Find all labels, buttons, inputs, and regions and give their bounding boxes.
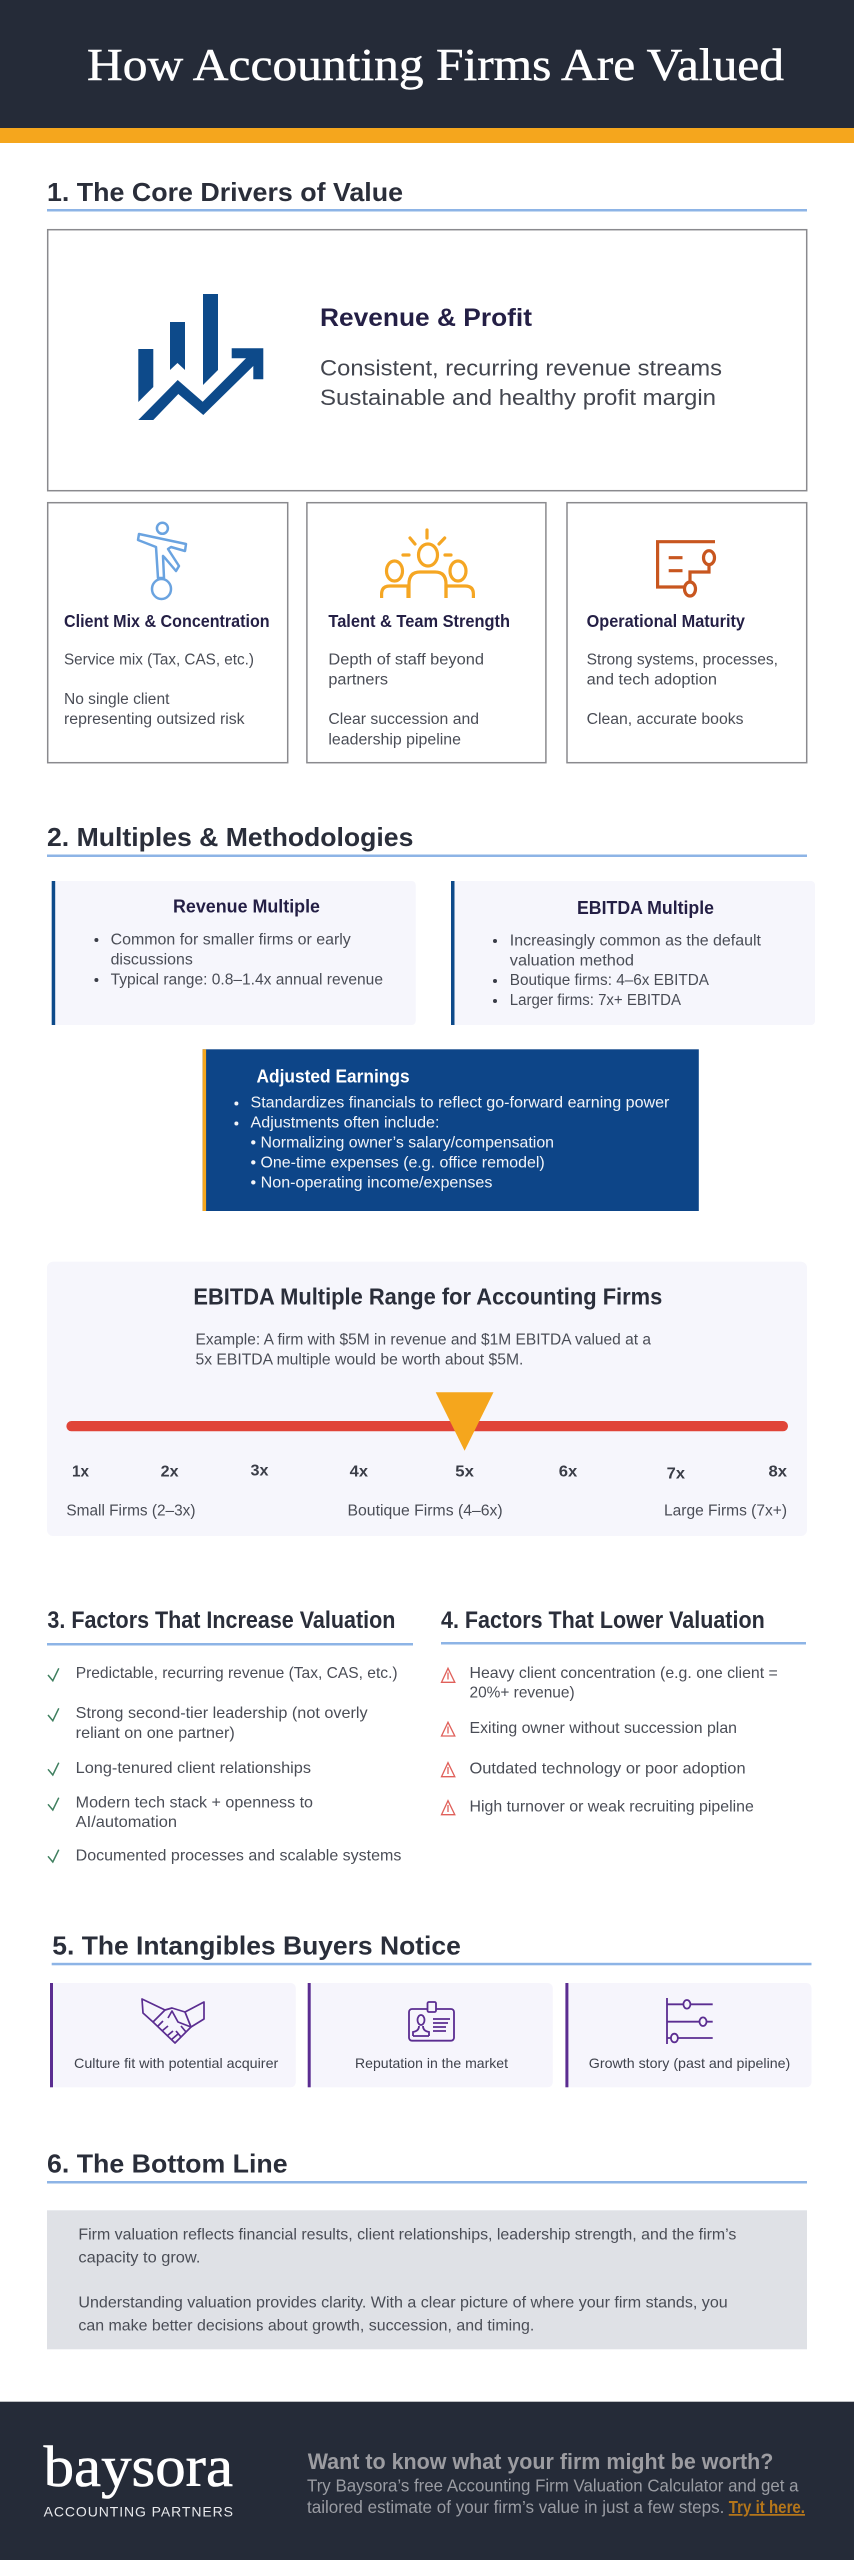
- list: adjusted earnings points: • Non-operating income/expenses: [250, 1175, 493, 1192]
- list: lower factors with warning icons: Exiting owner without succession plan: [470, 1720, 737, 1737]
- list: lower factors with warning icons: [442, 1665, 778, 1816]
- scale labels: 8x: [768, 1464, 787, 1481]
- panel: culture fit: [50, 1983, 296, 2087]
- section 2: multiples and methodologies: [47, 822, 815, 1536]
- list: revenue multiple points: discussions: [111, 951, 193, 968]
- list: lower factors with warning icons: Heavy client concentration (e.g. one client =: [470, 1665, 778, 1682]
- icon: team with light rays: [382, 530, 473, 598]
- marker at 5x: [436, 1392, 494, 1451]
- text: talent details: Depth of staff beyond: [328, 652, 484, 669]
- call to action: Try Baysora’s free Accounting Firm Valuation Calculator and get a: [307, 2476, 799, 2496]
- firm size labels: [66, 1503, 787, 1520]
- header banner: [0, 0, 854, 143]
- card heading: EBITDA multiple: EBITDA Multiple: [577, 898, 714, 918]
- text: worked example: Example: A firm with $5M in revenue and $1M EBITDA valued at a: [196, 1332, 651, 1349]
- text: revenue and profit description: Consistent, recurring revenue streams: [320, 356, 722, 381]
- panel: operational maturity: [567, 503, 807, 763]
- section 5: intangibles buyers notice: [50, 1931, 812, 2087]
- firm size labels: Boutique Firms (4–6x): [348, 1503, 503, 1520]
- text: operational details: and tech adoption: [587, 672, 717, 689]
- list: lower factors with warning icons: 20%+ revenue): [470, 1685, 575, 1702]
- card heading: talent: Talent & Team Strength: [328, 611, 510, 631]
- call to action: Try it here.: [729, 2497, 805, 2517]
- icon: balancing figure: [138, 523, 186, 599]
- footer: [0, 2402, 854, 2560]
- panel: adjusted earnings: [203, 1049, 699, 1211]
- section 4: factors that lower valuation: [441, 1607, 806, 1816]
- panel: growth story: [565, 1983, 812, 2087]
- panel: EBITDA multiple range chart: [47, 1262, 807, 1536]
- list: increase factors with check marks: Documented processes and scalable systems: [76, 1847, 401, 1864]
- call to action: Want to know what your firm might be worth?: [308, 2449, 773, 2474]
- scale labels: 5x: [455, 1464, 474, 1481]
- text: talent details: [328, 652, 484, 749]
- panel: revenue multiple: [52, 881, 416, 1025]
- card heading: operational maturity: Operational Maturity: [587, 611, 745, 631]
- section 6: the bottom line: [47, 2148, 807, 2349]
- list: EBITDA multiple points: valuation method: [510, 952, 634, 969]
- list: EBITDA multiple points: Increasingly common as the default: [510, 932, 762, 949]
- list: increase factors with check marks: reliant on one partner): [76, 1725, 235, 1742]
- list: adjusted earnings points: • One-time expenses (e.g. office remodel): [250, 1155, 545, 1172]
- text: client mix details: No single client: [64, 691, 170, 708]
- panel: summary text: capacity to grow.: [78, 2249, 200, 2266]
- section 3: factors that increase valuation: [47, 1607, 413, 1864]
- logo: baysora: ACCOUNTING PARTNERS: [44, 2503, 233, 2519]
- panel: client mix and concentration: [48, 503, 288, 763]
- list: increase factors with check marks: Long-tenured client relationships: [76, 1760, 311, 1777]
- panel: talent and team strength: [307, 503, 546, 763]
- logo: baysora: baysora: [44, 2434, 233, 2499]
- list: revenue multiple points: Common for smaller firms or early: [111, 931, 351, 948]
- scale labels: 1x: [72, 1464, 89, 1481]
- panel: reputation: [308, 1983, 553, 2087]
- heading: section 4: 4. Factors That Lower Valuation: [441, 1607, 765, 1634]
- label: growth story: Growth story (past and pipeline): [589, 2055, 790, 2071]
- list: lower factors with warning icons: High turnover or weak recruiting pipeline: [470, 1799, 754, 1816]
- text: revenue and profit description: [320, 356, 722, 410]
- heading: section 2: 2. Multiples & Methodologies: [47, 822, 413, 852]
- icon: timeline sliders: [667, 1998, 713, 2044]
- list: increase factors with check marks: Strong second-tier leadership (not overly: [76, 1705, 368, 1722]
- firm size labels: Small Firms (2–3x): [66, 1503, 196, 1520]
- icon: handshake: [142, 1999, 204, 2043]
- scale labels: [72, 1463, 787, 1483]
- card heading: revenue and profit: Revenue & Profit: [320, 304, 533, 332]
- text: worked example: 5x EBITDA multiple would be worth about $5M.: [196, 1352, 523, 1369]
- scale labels: 2x: [161, 1464, 179, 1481]
- panel: revenue and profit: [48, 230, 807, 491]
- card heading: revenue multiple: Revenue Multiple: [173, 897, 320, 917]
- title: How Accounting Firms Are Valued: [87, 39, 784, 90]
- text: client mix details: Service mix (Tax, CAS, etc.): [64, 652, 254, 669]
- heading: section 6: 6. The Bottom Line: [47, 2148, 288, 2178]
- list: adjusted earnings points: • Normalizing owner’s salary/compensation: [250, 1135, 554, 1152]
- call to action: tailored estimate of your firm’s value in just a few steps.: [307, 2497, 724, 2517]
- text: operational details: [587, 652, 778, 728]
- text: talent details: leadership pipeline: [328, 732, 461, 749]
- list: increase factors with check marks: [48, 1665, 401, 1864]
- panel: summary text: can make better decisions about growth, succession, and timing.: [78, 2317, 534, 2334]
- list: EBITDA multiple points: [493, 932, 762, 1009]
- text: client mix details: [64, 652, 254, 728]
- list: increase factors with check marks: Modern tech stack + openness to: [76, 1794, 313, 1811]
- panel: summary text: [47, 2210, 807, 2349]
- icon: ID badge: [409, 2002, 454, 2041]
- list: revenue multiple points: [94, 931, 383, 988]
- scale bar: [66, 1421, 788, 1431]
- scale labels: 7x: [667, 1466, 685, 1483]
- text: talent details: partners: [328, 672, 388, 689]
- call to action: [307, 2449, 805, 2517]
- list: increase factors with check marks: AI/automation: [76, 1814, 177, 1831]
- list: adjusted earnings points: [234, 1095, 669, 1192]
- panel: summary text: Understanding valuation provides clarity. With a clear picture of where your firm stands, you: [78, 2295, 728, 2312]
- list: EBITDA multiple points: Larger firms: 7x+ EBITDA: [510, 992, 682, 1009]
- card heading: client mix: Client Mix & Concentration: [64, 611, 270, 631]
- scale labels: 4x: [350, 1464, 368, 1481]
- label: culture fit: Culture fit with potential acquirer: [74, 2055, 279, 2071]
- text: talent details: Clear succession and: [328, 711, 479, 728]
- card heading: adjusted earnings: Adjusted Earnings: [256, 1067, 410, 1087]
- icon: rising bar chart with arrow: [138, 294, 263, 420]
- icon: process chart: [658, 542, 715, 596]
- scale labels: 6x: [559, 1464, 577, 1481]
- panel: EBITDA multiple: [451, 881, 815, 1025]
- list: adjusted earnings points: Adjustments often include:: [250, 1115, 440, 1132]
- list: EBITDA multiple points: Boutique firms: 4–6x EBITDA: [510, 972, 710, 989]
- label: reputation: Reputation in the market: [355, 2055, 508, 2071]
- text: operational details: Clean, accurate books: [587, 711, 744, 728]
- scale labels: 3x: [250, 1463, 269, 1480]
- heading: section 5: 5. The Intangibles Buyers Notice: [52, 1931, 461, 1961]
- firm size labels: Large Firms (7x+): [664, 1503, 787, 1520]
- text: operational details: Strong systems, processes,: [587, 652, 778, 669]
- chart title: EBITDA Multiple Range for Accounting Firms: [193, 1283, 662, 1309]
- panel: summary text: Firm valuation reflects financial results, client relationships, leadership strength, and the firm’s: [78, 2226, 736, 2243]
- list: adjusted earnings points: Standardizes financials to reflect go-forward earning power: [250, 1095, 669, 1112]
- list: lower factors with warning icons: Outdated technology or poor adoption: [470, 1761, 746, 1778]
- text: revenue and profit description: Sustainable and healthy profit margin: [320, 385, 716, 410]
- heading: section 3: 3. Factors That Increase Valuation: [47, 1607, 395, 1634]
- list: increase factors with check marks: Predictable, recurring revenue (Tax, CAS, etc.): [76, 1665, 398, 1682]
- section 1: core drivers of value: [47, 177, 807, 763]
- heading: section 1: 1. The Core Drivers of Value: [47, 177, 403, 207]
- text: client mix details: representing outsized risk: [64, 711, 245, 728]
- text: worked example: [196, 1332, 651, 1369]
- list: revenue multiple points: Typical range: 0.8–1.4x annual revenue: [111, 971, 383, 988]
